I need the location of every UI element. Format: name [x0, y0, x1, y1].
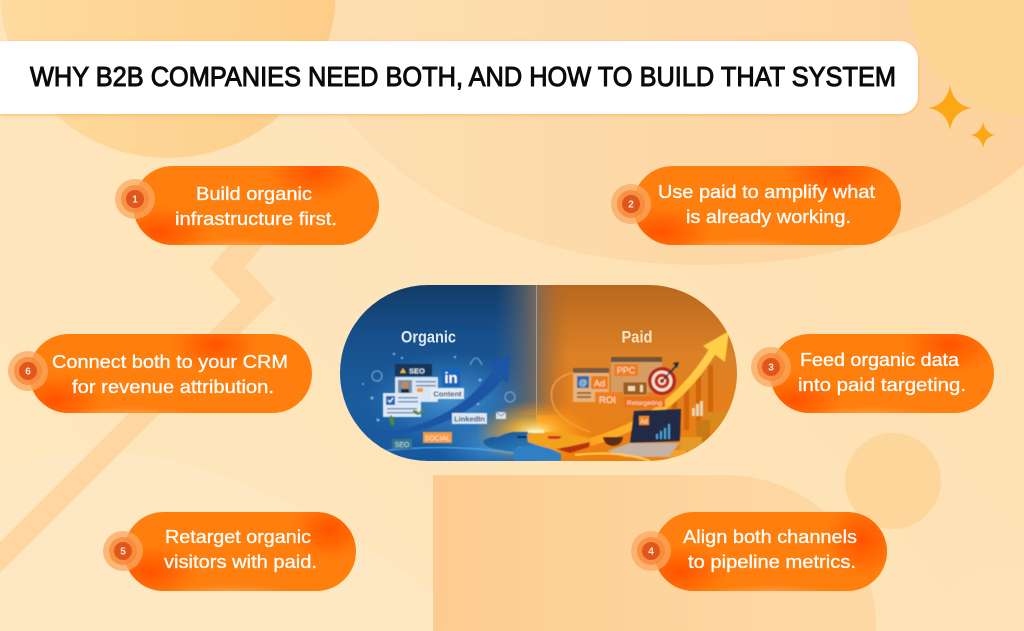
tag: retargeting: Retargeting [627, 400, 662, 407]
step 2 pill [611, 166, 901, 245]
badge 5: 5 [120, 546, 126, 558]
step 2 pill: Use paid to amplify what [658, 181, 875, 202]
title: WHY B2B COMPANIES NEED BOTH, AND HOW TO BUILD THAT SYSTEM [30, 61, 896, 92]
checklist card [383, 393, 421, 417]
SEO header card [395, 364, 432, 376]
paid side background [537, 285, 737, 461]
tag: social [423, 432, 452, 443]
ad window: @ [579, 378, 587, 388]
puzzle pieces [483, 430, 592, 461]
badge 4: 4 [648, 546, 654, 558]
icon: linkedin: in [444, 370, 458, 387]
badge 2: 2 [628, 200, 634, 210]
tag: seo: SEO [395, 442, 410, 449]
step 6 pill: Connect both to your CRM [52, 351, 288, 372]
tag: content: Content [433, 390, 462, 398]
step 1 pill [115, 166, 379, 245]
organic growth arrow [366, 355, 510, 439]
title banner [0, 41, 918, 114]
badge 2 [611, 184, 651, 224]
organic label: Organic [401, 328, 456, 346]
tag: roi [595, 392, 620, 408]
icon: mail [496, 412, 506, 419]
badge 3 [751, 347, 791, 387]
step 4 pill [631, 512, 887, 591]
coins [668, 412, 727, 458]
step 6 pill: for revenue attribution. [72, 376, 274, 397]
plants [390, 409, 424, 425]
step 4 pill: to pipeline metrics. [688, 551, 856, 572]
step 2 pill: is already working. [686, 206, 851, 227]
tag: retargeting [624, 397, 665, 407]
ad window: Ad [594, 378, 605, 390]
paid growth arrow [590, 331, 729, 442]
paid decorations: chart bars [672, 365, 713, 435]
step 4 pill: Align both channels [683, 526, 857, 547]
step 5 pill [103, 512, 356, 591]
mini bars [692, 401, 703, 416]
step 5 pill: visitors with paid. [164, 551, 317, 572]
badge 4 [631, 531, 671, 571]
step 3 pill [751, 334, 994, 413]
icon: linkedin [442, 368, 460, 387]
step 1 pill: Build organic [196, 183, 312, 204]
paid label: Paid [622, 328, 652, 346]
ppc window: PPC [617, 366, 636, 376]
badge 1 [115, 179, 155, 219]
profile card [395, 377, 438, 402]
badge 6 [8, 351, 48, 391]
small dark tag [623, 382, 647, 395]
step 5 pill: Retarget organic [165, 526, 311, 547]
decorative bowl [603, 437, 623, 446]
icon: sparkles [928, 85, 995, 148]
organic decorations [370, 356, 516, 454]
badge 6: 6 [25, 366, 31, 378]
tag: social: SOCIAL [425, 436, 450, 442]
step 6 pill [8, 334, 312, 413]
tag: linkedin: LinkedIn [454, 414, 485, 424]
SEO header card: SEO [409, 366, 425, 376]
organic side background [340, 285, 537, 461]
tag: seo [392, 439, 412, 449]
central image: organic vs paid [340, 285, 737, 475]
tag: roi: ROI [599, 395, 616, 406]
badge 3: 3 [768, 362, 774, 374]
step 3 pill: into paid targeting. [798, 374, 966, 395]
step 3 pill: Feed organic data [800, 349, 960, 370]
icon: target [648, 362, 679, 395]
ppc window [611, 357, 662, 392]
ad window [573, 368, 609, 402]
badge 1: 1 [132, 194, 138, 206]
icon: laptop [607, 409, 681, 457]
step 1 pill: infrastructure first. [175, 208, 337, 229]
badge 5 [103, 531, 143, 571]
icon: laptop: Ad [640, 420, 648, 426]
